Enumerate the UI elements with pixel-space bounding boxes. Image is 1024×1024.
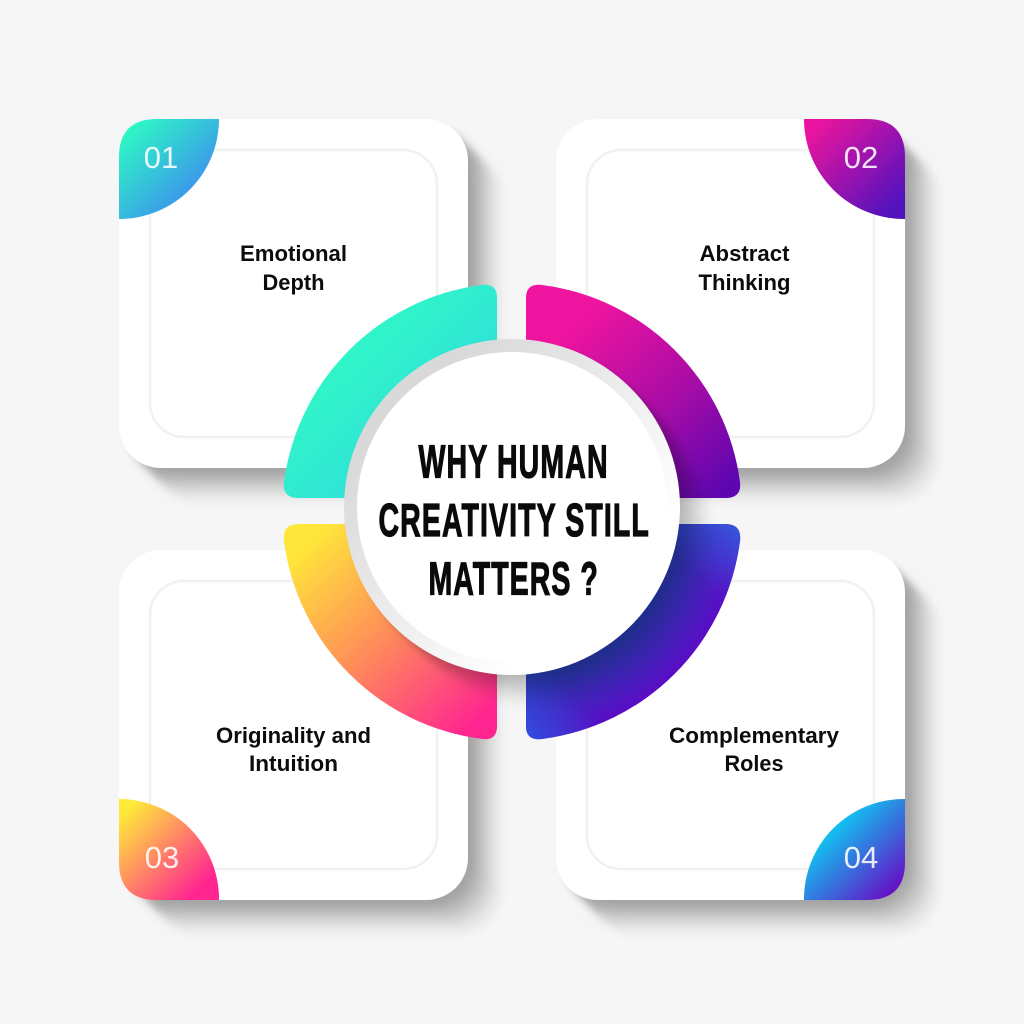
label: emotional depth bbox=[240, 241, 347, 295]
icon: corner badge 04 bbox=[804, 799, 905, 900]
label: abstract thinking: Abstract bbox=[700, 241, 790, 266]
arc: bottom left yellow pink bbox=[284, 524, 497, 739]
icon: corner badge 03 bbox=[119, 799, 219, 900]
label: originality and intuition: Originality and bbox=[216, 723, 371, 748]
center circle with title bbox=[344, 339, 714, 709]
icon: corner badge 01 bbox=[119, 119, 219, 219]
arc: top left teal bbox=[284, 285, 497, 498]
label: originality and intuition bbox=[216, 723, 371, 776]
panel: card 03 originality and intuition bbox=[119, 550, 503, 935]
icon: corner badge 04: 04 bbox=[844, 840, 878, 875]
chart: four gradient quadrant arcs bbox=[284, 285, 740, 739]
label: emotional depth: Emotional bbox=[240, 241, 347, 266]
icon: corner badge 03: 03 bbox=[145, 840, 179, 875]
title: CREATIVITY STILL bbox=[378, 495, 649, 547]
icon: corner badge 02 bbox=[804, 119, 905, 219]
panel: card 04 complementary roles bbox=[556, 550, 940, 935]
label: abstract thinking bbox=[698, 241, 790, 295]
label: emotional depth: Depth bbox=[262, 270, 324, 295]
label: complementary roles: Complementary bbox=[669, 723, 839, 748]
icon: corner badge 02: 02 bbox=[844, 140, 878, 175]
label: originality and intuition: Intuition bbox=[249, 751, 338, 776]
arc: top right magenta bbox=[526, 285, 740, 498]
icon: corner badge 01: 01 bbox=[144, 140, 178, 175]
arc: bottom right blue purple bbox=[526, 524, 740, 739]
title: MATTERS ? bbox=[428, 554, 598, 605]
title: WHY HUMAN bbox=[418, 437, 608, 488]
title bbox=[378, 437, 649, 605]
label: complementary roles: Roles bbox=[724, 751, 784, 776]
panel: card 01 emotional depth bbox=[119, 119, 503, 503]
label: complementary roles bbox=[669, 723, 839, 776]
label: abstract thinking: Thinking bbox=[698, 270, 790, 295]
panel: card 02 abstract thinking bbox=[556, 119, 940, 503]
